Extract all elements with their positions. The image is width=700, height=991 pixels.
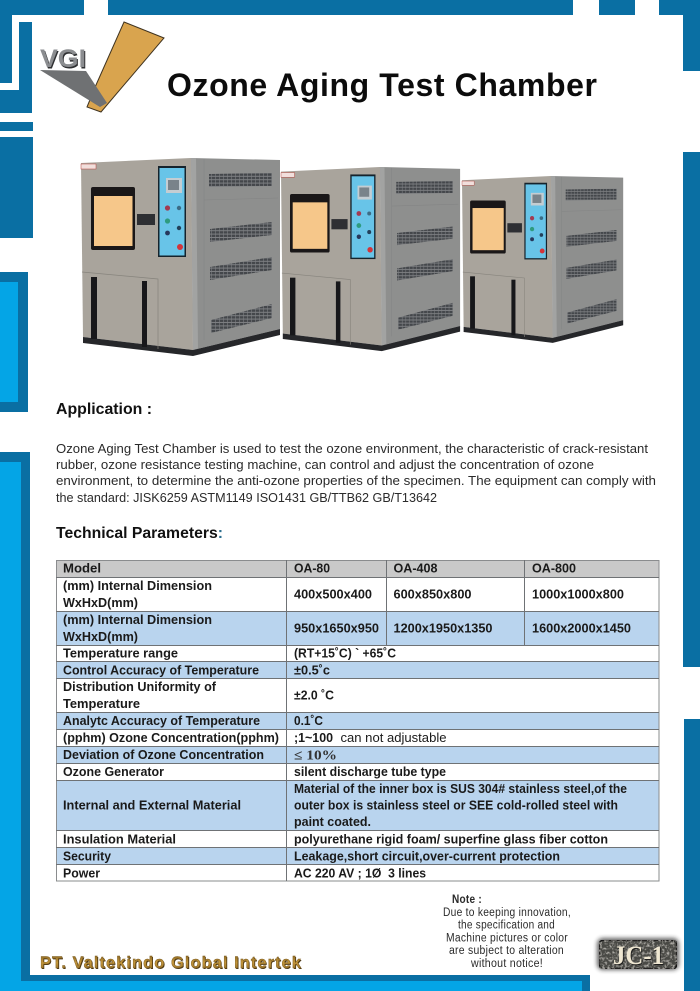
table row: control accuracy: Control Accuracy of Temperature — [63, 662, 259, 678]
table row: material: outer box is stainless steel or SEE cold-rolled steel with — [294, 798, 618, 812]
table row: security: Leakage,short circuit,over-current protection — [294, 848, 560, 864]
door handle — [137, 214, 155, 225]
table row: insulation: polyurethane rigid foam/ superfine glass fiber cotton — [294, 832, 608, 846]
logo: VGI — [40, 22, 164, 112]
table row: temperature range: (RT+15˚C) ` +65˚C — [294, 646, 397, 660]
badge: JC-1: JC-1 — [613, 941, 664, 970]
table row: external dimension: 950x1650x950 — [294, 620, 379, 636]
table row: ozone concentration: ;1~100 — [294, 730, 333, 745]
table row: security: Security — [63, 848, 112, 864]
table row: internal dimension — [63, 578, 624, 610]
company name: PT. Valtekindo Global Intertek — [40, 953, 302, 972]
side ventilation grilles — [209, 173, 272, 333]
table row: material: Internal and External Material — [63, 798, 241, 812]
table row: material: paint coated. — [294, 814, 371, 829]
company name: PT. Valtekindo Global Intertek — [41, 954, 303, 973]
table row: distribution uniformity: Distribution Uniformity of — [63, 679, 217, 694]
table row: temperature range: Temperature range — [63, 646, 178, 660]
table row: internal dimension: 600x850x800 — [394, 586, 472, 602]
table row: power: Power — [63, 866, 100, 880]
application description: environment, to determine the anti-ozone properties of the specimen. The equipment can comply with — [56, 473, 656, 488]
table row: model: Model — [63, 560, 101, 576]
application description: rubber, ozone resistance testing machine, can control and adjust the concentration of ozone — [56, 457, 594, 472]
table row: ozone concentration: can not adjustable — [340, 730, 446, 745]
control panel — [158, 166, 186, 257]
table row: internal dimension: 1000x1000x800 — [532, 586, 624, 602]
note text: Note : — [452, 894, 482, 906]
chamber base — [83, 329, 280, 356]
parameters table — [56, 560, 659, 881]
decorative blue frame: left and bottom — [0, 272, 590, 991]
badge: JC-1 — [597, 938, 679, 971]
table row: external dimension: WxHxD(mm) — [63, 629, 138, 644]
table row: model: OA-800 — [532, 560, 576, 576]
heading: technical parameters: Technical Parameters: — [56, 525, 223, 542]
table row: power — [63, 866, 426, 880]
logo: VGI: VGI — [40, 45, 86, 73]
note text — [443, 894, 571, 970]
note text: Machine pictures or color — [446, 932, 568, 944]
table row: internal dimension: (mm) Internal Dimension — [63, 578, 212, 593]
table row fills — [56, 560, 659, 864]
chamber side face — [191, 158, 280, 350]
heading: application: Application : — [56, 401, 152, 418]
table row: insulation: Insulation Material — [63, 832, 176, 846]
note text: without notice! — [470, 958, 543, 970]
table row: external dimension — [63, 612, 631, 644]
table row: insulation — [63, 832, 608, 846]
table row: model: OA-80 — [294, 560, 330, 576]
table row: analytic accuracy: 0.1˚C — [294, 713, 324, 728]
application description: the standard: JISK6259 ASTM1149 ISO1431 GB/TTB62 GB/T13642 — [56, 490, 437, 505]
note text: the specification and — [458, 920, 555, 932]
table row: control accuracy: ±0.5˚c — [294, 662, 330, 678]
table row: ozone generator: silent discharge tube type — [294, 764, 446, 779]
table row: power: AC 220 AV ; 1Ø 3 lines — [294, 866, 426, 880]
table row: model — [63, 560, 576, 576]
table row: temperature range — [63, 646, 397, 660]
title: Ozone Aging Test Chamber — [167, 67, 597, 103]
badge: JC-1: JC-1 — [614, 942, 665, 971]
table row: material: Material of the inner box is SUS 304# stainless steel,of the — [294, 781, 627, 796]
table row: ozone concentration: (pphm) Ozone Concentration(pphm) — [63, 730, 279, 745]
door divider — [82, 272, 158, 349]
application description — [56, 441, 656, 505]
chamber front face — [81, 158, 193, 350]
table row: distribution uniformity: Temperature — [63, 696, 140, 711]
nameplate — [81, 164, 96, 169]
product photo: medium chamber — [281, 167, 460, 351]
table row: distribution uniformity — [63, 679, 335, 711]
black door strips — [91, 277, 147, 347]
table row: material — [63, 781, 627, 829]
table row: deviation: Deviation of Ozone Concentration — [63, 747, 264, 762]
table row: ozone generator: Ozone Generator — [63, 764, 164, 779]
table row: distribution uniformity: ±2.0 ˚C — [294, 688, 335, 702]
table row: analytic accuracy: Analytc Accuracy of Temperature — [63, 713, 260, 728]
application description: Ozone Aging Test Chamber is used to test the ozone environment, the characteristic of crack-resistant — [56, 441, 648, 456]
note text: Due to keeping innovation, — [443, 907, 571, 919]
table row: external dimension: 1600x2000x1450 — [532, 620, 631, 636]
table row: deviation: ≤ 10% — [294, 748, 337, 762]
note text: are subject to alteration — [449, 945, 564, 957]
logo: VGI: VGI — [41, 46, 87, 74]
table row: internal dimension: WxHxD(mm) — [63, 595, 138, 610]
table row: ozone generator — [63, 764, 446, 779]
table row: model: OA-408 — [394, 560, 438, 576]
window glass — [94, 196, 132, 246]
table row: external dimension: (mm) Internal Dimension — [63, 612, 212, 627]
observation window — [91, 187, 135, 250]
table row: security — [63, 848, 560, 864]
table row: ozone concentration — [63, 730, 446, 745]
table row: external dimension: 1200x1950x1350 — [394, 620, 492, 636]
product photo: large chamber — [81, 158, 280, 356]
table row: internal dimension: 400x500x400 — [294, 586, 372, 602]
product photo: small chamber — [462, 176, 623, 343]
